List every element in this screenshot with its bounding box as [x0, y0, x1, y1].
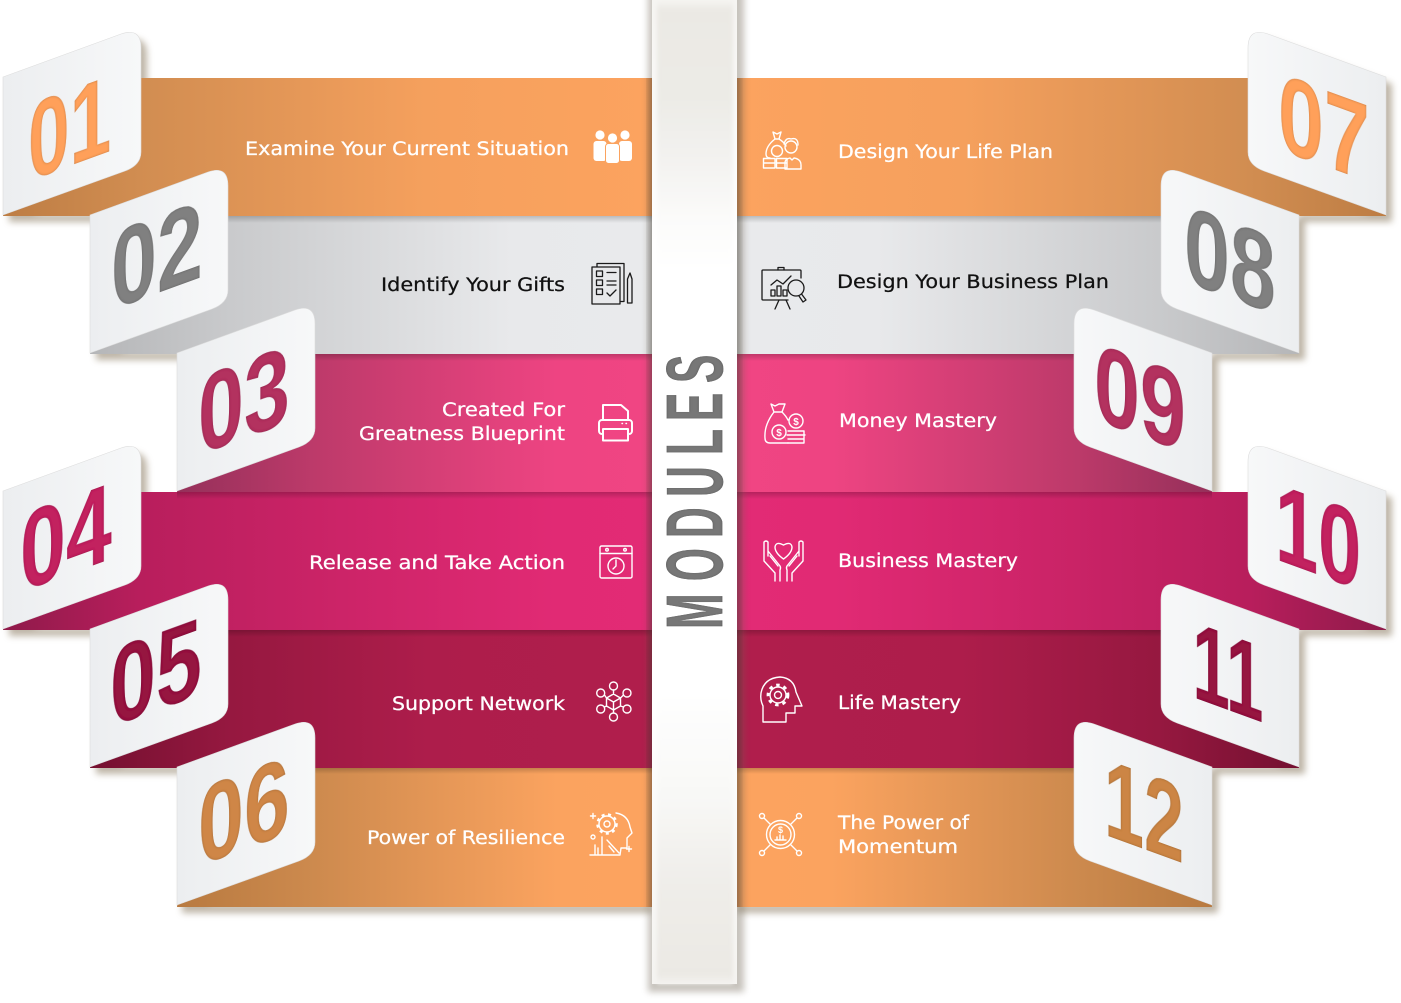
number 12: 12: [1104, 736, 1184, 888]
ribbon 11: [737, 630, 1299, 768]
icon: checklist: [592, 264, 632, 304]
icon: momentum target: [760, 814, 802, 856]
module 05: [90, 584, 652, 768]
number 09: 09: [1094, 321, 1186, 477]
vertical title: MODULES: [650, 355, 739, 629]
label 03: Created For: [442, 400, 565, 421]
icon: money bag and coins: [765, 404, 805, 443]
centre column: [646, 0, 744, 992]
module 08: [737, 170, 1299, 354]
card 10: [1248, 446, 1386, 629]
ribbon 10: [737, 492, 1386, 630]
label 06: Power of Resilience: [367, 828, 565, 849]
ribbon 08: [737, 216, 1299, 354]
ribbon 09: [737, 354, 1212, 492]
label 12: Momentum: [838, 837, 958, 858]
number 08: 08: [1184, 183, 1276, 339]
card 09: [1074, 308, 1212, 491]
ribbon 12: [737, 768, 1212, 907]
label 09: Money Mastery: [839, 411, 997, 432]
module 04: [3, 446, 652, 630]
label 10: Business Mastery: [838, 551, 1018, 572]
number 01: 01: [28, 52, 111, 205]
number 07: 07: [1278, 51, 1370, 207]
label 05: Support Network: [392, 694, 565, 715]
label 01: Examine Your Current Situation: [245, 139, 569, 160]
ribbon 05: [90, 630, 652, 768]
module 11: [737, 584, 1299, 768]
card 06: [177, 722, 315, 905]
ribbon 06: [177, 768, 652, 907]
ribbon 04: [3, 492, 652, 630]
label 03: Greatness Blueprint: [359, 424, 565, 445]
icon: head with gear: [761, 677, 802, 722]
number 03: 03: [198, 323, 290, 479]
icon dollar 12: $: [778, 825, 783, 835]
icon: team: [594, 130, 632, 164]
label 02: Identify Your Gifts: [381, 275, 565, 296]
icon: head with gear: [590, 813, 632, 855]
card 12: [1074, 722, 1212, 905]
card 05: [90, 584, 228, 767]
module 12: [737, 722, 1212, 907]
module 01: [3, 32, 652, 216]
number 06: 06: [198, 734, 290, 890]
number 04: 04: [20, 460, 112, 616]
icon: hands holding heart: [764, 541, 803, 581]
module 06: [177, 722, 652, 907]
icon dollars 09: $: [776, 428, 782, 439]
label 07: Design Your Life Plan: [838, 142, 1053, 163]
card 01: [3, 32, 141, 215]
icon: money bag and person: [764, 132, 801, 169]
module 03: [177, 308, 652, 492]
ribbon 01: [3, 78, 652, 216]
module 09: [737, 308, 1212, 492]
card 04: [3, 446, 141, 629]
label 08: Design Your Business Plan: [837, 272, 1109, 293]
ribbon 07: [737, 78, 1386, 216]
card 11: [1161, 584, 1299, 767]
number 02: 02: [111, 178, 203, 334]
card 08: [1161, 170, 1299, 353]
card 02: [90, 170, 228, 353]
label 12: [837, 813, 970, 858]
label 12: The Power of: [837, 813, 970, 834]
ribbon 02: [90, 216, 652, 354]
icon: presentation board: [762, 268, 806, 309]
label 04: Release and Take Action: [309, 553, 565, 574]
number 10: 10: [1275, 459, 1361, 614]
icon: calendar clock: [600, 546, 632, 578]
card 03: [177, 308, 315, 491]
card 07: [1248, 32, 1386, 215]
number 11: 11: [1192, 597, 1263, 747]
module 02: [90, 170, 652, 354]
icon dollars 09: $: [793, 417, 799, 428]
icon dollars 09: [776, 417, 799, 439]
number 05: 05: [110, 595, 202, 751]
label 11: Life Mastery: [838, 693, 961, 714]
icon: printer: [599, 405, 632, 440]
label 03: [359, 400, 565, 445]
module 07: [737, 32, 1386, 216]
ribbon 03: [177, 354, 652, 492]
module 10: [737, 446, 1386, 630]
icon: network: [597, 682, 631, 721]
